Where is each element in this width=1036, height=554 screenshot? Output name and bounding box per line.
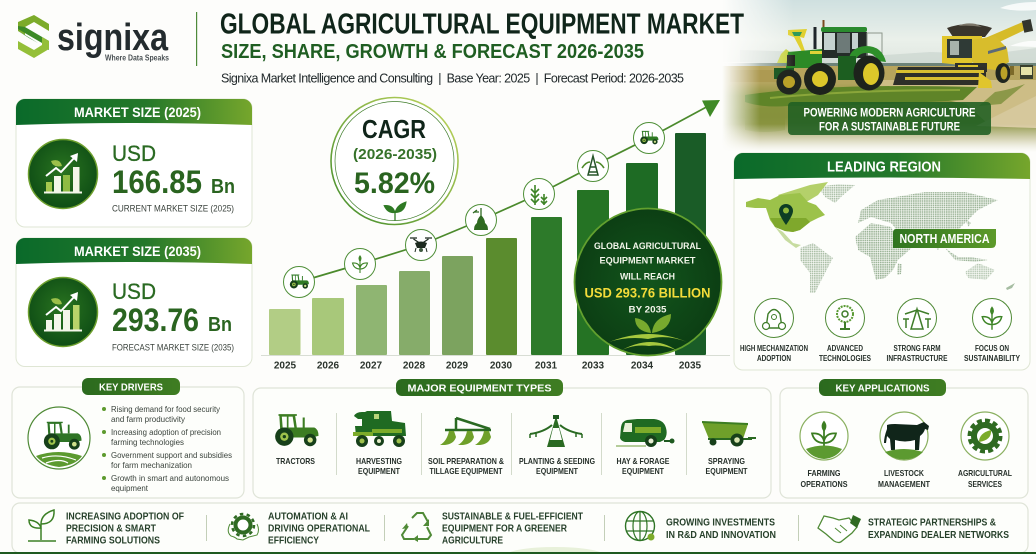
CAGR value: 5.82% xyxy=(354,167,435,200)
item: spraying: EQUIPMENT xyxy=(706,466,748,476)
subtitle: SIZE, SHARE, GROWTH & FORECAST 2026-2035 xyxy=(221,41,644,63)
value: USD xyxy=(112,279,156,304)
CAGR heading: CAGR xyxy=(362,114,426,144)
panel: market size 2025 xyxy=(16,99,252,227)
panel: key applications xyxy=(780,379,1028,498)
year labels: 2026 xyxy=(317,360,340,372)
item: precision farming: FARMING SOLUTIONS xyxy=(66,536,160,546)
bars xyxy=(269,133,706,355)
year labels: 2031 xyxy=(535,360,558,372)
world map xyxy=(746,182,1015,293)
icon: drone xyxy=(406,230,436,260)
icon: growth chart xyxy=(28,140,98,208)
region factors labels: ADOPTION xyxy=(757,354,791,363)
callout: 2035 forecast: WILL REACH xyxy=(620,272,675,282)
icon: wheat xyxy=(524,178,554,210)
panel header xyxy=(734,153,1030,179)
item: automation and AI: EFFICIENCY xyxy=(268,536,319,546)
item: tractors: TRACTORS xyxy=(276,456,315,466)
item: sustainable equipment: EQUIPMENT FOR A GREENER xyxy=(442,524,568,534)
panel: market size 2035 xyxy=(16,238,252,366)
heading pill: KEY DRIVERS xyxy=(99,382,163,394)
value: Bn xyxy=(208,314,232,336)
item: agricultural services xyxy=(958,412,1012,489)
item: livestock management xyxy=(878,412,931,489)
region label: NORTH AMERICA xyxy=(900,232,990,246)
region factors labels: SUSTAINABILITY xyxy=(964,354,1021,363)
item: sustainable equipment xyxy=(402,512,583,546)
panel: major equipment types xyxy=(253,379,771,498)
icon: tractor on field xyxy=(28,407,90,469)
item: spraying: SPRAYING xyxy=(708,456,745,466)
region factors labels: HIGH MECHANIZATION xyxy=(740,344,808,353)
item: harvesting: EQUIPMENT xyxy=(358,466,401,476)
icon: sprout xyxy=(383,201,407,221)
icon: map pin xyxy=(779,204,793,225)
icon: farm infrastructure xyxy=(898,298,936,338)
year labels: 2028 xyxy=(403,360,426,372)
heading pill: KEY APPLICATIONS xyxy=(836,382,930,394)
item: soil preparation: TILLAGE EQUIPMENT xyxy=(430,466,503,476)
panel header xyxy=(16,99,252,125)
CAGR badge xyxy=(331,98,458,224)
icon: tractor xyxy=(634,122,664,154)
value: 166.85 xyxy=(112,164,202,200)
item: livestock management: LIVESTOCK xyxy=(884,468,925,478)
item: soil preparation: SOIL PREPARATION & xyxy=(428,456,504,466)
item: hay and forage xyxy=(616,419,674,476)
item: farming operations xyxy=(800,412,848,489)
icon: seedling xyxy=(344,248,376,280)
driver list: Government support and subsidies xyxy=(111,450,233,460)
panel: key drivers xyxy=(12,378,244,498)
combine harvester xyxy=(893,19,1033,88)
year labels: 2029 xyxy=(446,360,469,372)
value xyxy=(112,141,235,200)
arrow: growth trend xyxy=(299,100,720,282)
region factors labels: FOCUS ON xyxy=(975,344,1009,353)
year labels: 2030 xyxy=(490,360,513,372)
icon: tractor xyxy=(284,266,314,298)
header label: LEADING REGION xyxy=(827,160,941,176)
panel: trends strip xyxy=(12,503,1028,554)
driver list: Rising demand for food security xyxy=(111,404,221,414)
driver list: Growth in smart and autonomous xyxy=(111,473,230,483)
item: precision farming: INCREASING ADOPTION OF xyxy=(66,512,184,522)
item: farming operations: OPERATIONS xyxy=(800,479,848,489)
item: R&D investments xyxy=(626,511,776,541)
heading pill xyxy=(819,379,946,396)
region label xyxy=(893,229,996,248)
item: hay and forage: HAY & FORAGE xyxy=(616,456,670,466)
item: sustainable equipment: SUSTAINABLE & FUEL-EFFICIENT xyxy=(442,512,583,522)
callout: 2035 forecast: GLOBAL AGRICULTURAL xyxy=(594,241,701,252)
driver list: for farm mechanization xyxy=(111,460,192,470)
item: precision farming: PRECISION & SMART xyxy=(66,524,156,534)
bar chart xyxy=(261,133,730,372)
driver list: equipment xyxy=(111,483,149,493)
callout: 2035 forecast xyxy=(574,208,722,356)
item: automation and AI: AUTOMATION & AI xyxy=(268,512,348,522)
panel header xyxy=(16,238,252,264)
callout: 2035 forecast: BY 2035 xyxy=(628,304,667,316)
photo caption: POWERING MODERN AGRICULTURE xyxy=(804,108,976,120)
title: GLOBAL AGRICULTURAL EQUIPMENT MARKET xyxy=(220,8,744,40)
item: agricultural services: AGRICULTURAL xyxy=(958,468,1012,478)
item: farming operations: FARMING xyxy=(808,468,841,478)
item: livestock management: MANAGEMENT xyxy=(878,479,931,489)
year labels: 2034 xyxy=(631,360,654,372)
tractor xyxy=(774,20,886,95)
header label: MARKET SIZE (2025) xyxy=(74,105,201,120)
item: precision farming xyxy=(28,510,184,546)
item: strategic partnerships: EXPANDING DEALER NETWORKS xyxy=(868,530,1009,541)
value: Bn xyxy=(211,176,235,198)
value: 293.76 xyxy=(112,302,199,338)
item: R&D investments: IN R&D AND INNOVATION xyxy=(666,530,776,541)
photo caption xyxy=(788,102,991,135)
region factors labels xyxy=(740,344,1021,363)
heading pill: MAJOR EQUIPMENT TYPES xyxy=(408,382,552,394)
icon: leaves over fields xyxy=(609,314,687,350)
driver list: and farm productivity xyxy=(111,414,186,424)
item: planting and seeding: EQUIPMENT xyxy=(536,466,579,476)
item: automation and AI xyxy=(228,512,370,546)
logo xyxy=(18,15,169,62)
forecast value: USD 293.76 BILLION xyxy=(584,286,710,300)
icon: crop planting xyxy=(466,204,496,236)
value: USD xyxy=(112,141,156,166)
icon: irrigation tower xyxy=(578,150,608,182)
item: tractors xyxy=(275,414,318,466)
driver list: farming technologies xyxy=(111,437,185,447)
trend icons xyxy=(284,122,664,298)
photo caption: FOR A SUSTAINABLE FUTURE xyxy=(819,122,960,134)
driver list: Increasing adoption of precision xyxy=(111,427,221,437)
caption: FORECAST MARKET SIZE (2035) xyxy=(112,342,234,352)
panel: leading region xyxy=(734,153,1030,370)
icon: growth chart xyxy=(28,278,98,346)
value xyxy=(112,279,232,338)
region factors labels: STRONG FARM xyxy=(894,344,941,353)
item: harvesting: HARVESTING xyxy=(356,456,402,466)
icon: mechanization xyxy=(754,298,794,338)
region factors labels: TECHNOLOGIES xyxy=(819,354,872,363)
item: R&D investments: GROWING INVESTMENTS xyxy=(666,518,775,528)
item: hay and forage: EQUIPMENT xyxy=(622,466,665,476)
heading pill xyxy=(396,379,563,396)
callout: 2035 forecast: EQUIPMENT MARKET xyxy=(600,256,696,266)
item: automation and AI: DRIVING OPERATIONAL xyxy=(268,524,370,534)
logo wordmark: signixa xyxy=(57,17,169,59)
item: sustainable equipment: AGRICULTURE xyxy=(442,536,503,546)
year labels: 2025 xyxy=(274,360,297,372)
item: strategic partnerships xyxy=(818,515,1009,542)
caption: CURRENT MARKET SIZE (2025) xyxy=(112,204,234,214)
year labels xyxy=(274,360,702,372)
CAGR period: (2026-2035) xyxy=(353,146,437,163)
item: agricultural services: SERVICES xyxy=(968,479,1002,489)
year labels: 2035 xyxy=(679,360,702,372)
item: harvesting xyxy=(353,411,406,476)
logo tagline: Where Data Speaks xyxy=(105,54,169,62)
item: planting and seeding: PLANTING & SEEDING xyxy=(519,456,595,466)
header label: MARKET SIZE (2035) xyxy=(74,244,201,259)
icon: sustainability xyxy=(972,298,1012,338)
item: soil preparation xyxy=(428,418,504,476)
icon: advanced technologies xyxy=(826,298,864,338)
year labels: 2033 xyxy=(582,360,605,372)
region factors labels: ADVANCED xyxy=(827,344,863,353)
driver list xyxy=(102,404,233,493)
item: spraying xyxy=(702,421,756,476)
item: strategic partnerships: STRATEGIC PARTNERSHIPS & xyxy=(868,518,996,528)
hero photo: tractor and combine in field xyxy=(722,0,1036,152)
icon: signixa S mark xyxy=(18,15,49,58)
item: planting and seeding xyxy=(519,415,595,476)
year labels: 2027 xyxy=(360,360,383,372)
heading pill xyxy=(82,378,180,395)
region factors labels: INFRASTRUCTURE xyxy=(886,354,948,363)
meta line: Signixa Market Intelligence and Consulting | Base Year: 2025 | Forecast Period: 2026-2035 xyxy=(221,72,684,86)
